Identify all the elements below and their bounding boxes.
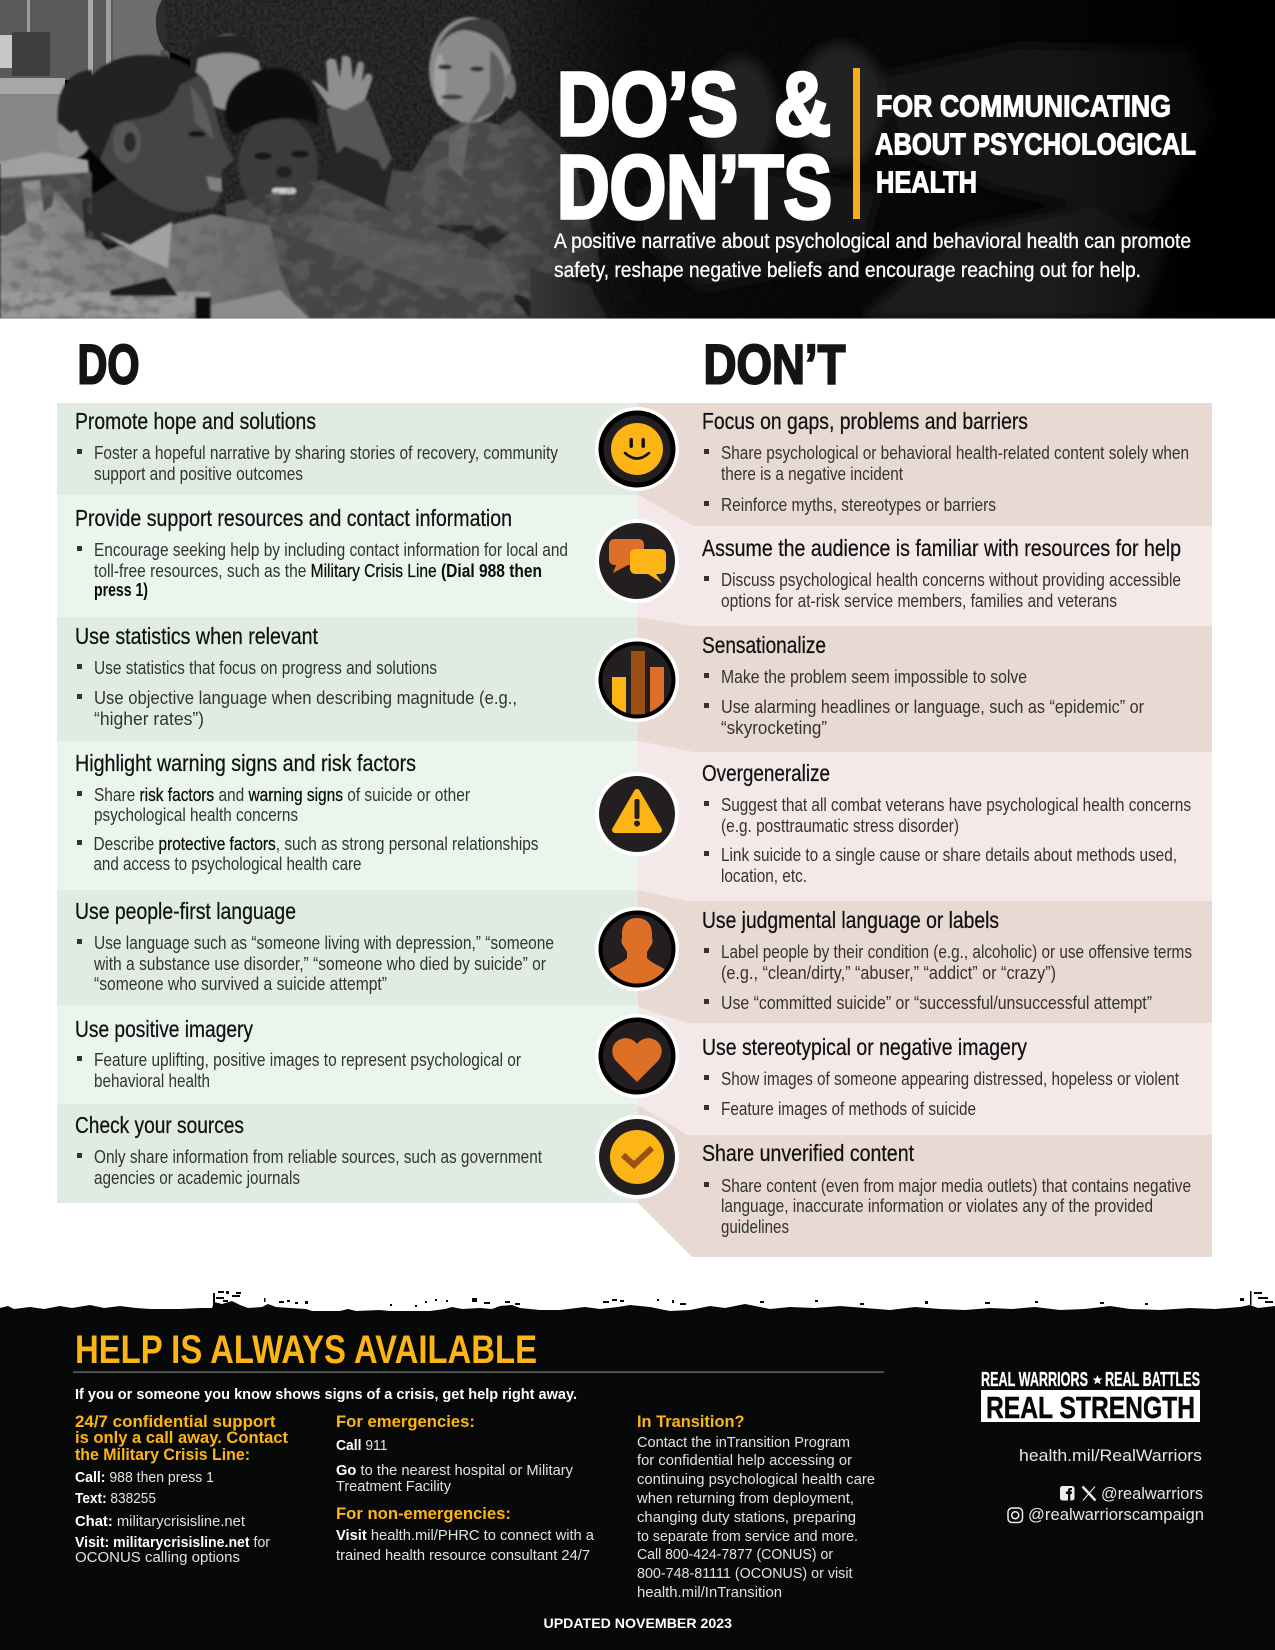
do row: check sources xyxy=(57,1104,638,1203)
dont row: overgeneralize: Link suicide to a single cause or share details about methods used, xyxy=(721,845,1177,865)
intro paragraph: safety, reshape negative beliefs and encourage reaching out for help. xyxy=(554,258,1141,282)
column: in transition: to separate from service and more. xyxy=(637,1529,858,1545)
subtitle: FOR COMMUNICATING xyxy=(876,90,1171,124)
column: in transition: for confidential help accessing or xyxy=(637,1453,852,1469)
dont row: sensationalize xyxy=(638,617,1212,752)
dont row: familiar audience: options for at-risk service members, families and veterans xyxy=(721,591,1117,611)
dont row: gaps: Focus on gaps, problems and barriers xyxy=(702,408,1028,434)
intro paragraph: A positive narrative about psychological and behavioral health can promote xyxy=(554,229,1191,253)
do row: promote hope: Promote hope and solutions xyxy=(75,408,316,434)
column: emergencies: Go to the nearest hospital or Military xyxy=(336,1463,574,1479)
dont row: judgmental language: Use judgmental language or labels xyxy=(702,907,999,933)
subtitle: ABOUT PSYCHOLOGICAL xyxy=(875,128,1196,162)
logo: Real Warriors: REAL STRENGTH xyxy=(986,1390,1195,1425)
column: emergencies: trained health resource consultant 24/7 xyxy=(336,1548,590,1564)
do row: warning signs: Describe protective factors, such as strong personal relationships xyxy=(94,834,538,854)
dont row: gaps: Share psychological or behavioral health-related content solely when xyxy=(721,443,1189,463)
do row: support resources: toll-free resources, such as the Military Crisis Line (Dial 988 then xyxy=(94,561,542,581)
heading: DON'T: DON’T xyxy=(704,332,846,396)
dont row: negative imagery: Feature images of methods of suicide xyxy=(721,1099,976,1119)
do row: positive imagery: behavioral health xyxy=(94,1071,210,1091)
header banner xyxy=(0,0,1275,319)
crisis sentence: If you or someone you know shows signs of a crisis, get help right away. xyxy=(75,1387,577,1403)
dont row: negative imagery: Use stereotypical or negative imagery xyxy=(702,1034,1027,1060)
dont row: judgmental language: (e.g., “clean/dirty,” “abuser,” “addict” or “crazy”) xyxy=(721,963,1056,983)
logo: Real Warriors: REAL WARRIORS xyxy=(981,1369,1088,1391)
intro paragraph xyxy=(554,229,1191,282)
do row: check sources: Check your sources xyxy=(75,1112,244,1138)
column: crisis line: 24/7 confidential support xyxy=(75,1413,276,1431)
dont row: negative imagery xyxy=(638,1007,1212,1135)
column: emergencies: For emergencies: xyxy=(336,1413,475,1431)
column: in transition: continuing psychological health care xyxy=(637,1472,875,1488)
do row: warning signs: psychological health concerns xyxy=(94,805,298,825)
camouflage texture xyxy=(0,110,600,319)
icon: heart xyxy=(595,1014,679,1098)
do row: statistics: Use objective language when describing magnitude (e.g., xyxy=(94,688,517,708)
logo: Real Warriors xyxy=(981,1369,1200,1425)
heading: DO: DO xyxy=(78,332,140,396)
column: emergencies: Visit health.mil/PHRC to connect with a xyxy=(336,1528,595,1544)
photo of soldiers xyxy=(0,0,1275,319)
dont row: unverified content: Share unverified content xyxy=(702,1140,914,1166)
rough torn edge xyxy=(0,1291,1275,1650)
dont row: gaps xyxy=(638,403,1212,526)
do row: warning signs xyxy=(57,741,638,890)
do row: statistics: Use statistics that focus on progress and solutions xyxy=(94,658,437,678)
dont row: familiar audience: Assume the audience is familiar with resources for help xyxy=(702,535,1181,561)
logo: Real Warriors: REAL BATTLES xyxy=(1105,1369,1200,1391)
do row: support resources: press 1) xyxy=(94,580,148,600)
column: crisis line: Chat: militarycrisisline.net xyxy=(75,1514,245,1530)
icon: bar chart xyxy=(595,638,679,722)
do row: people-first language: Use language such as “someone living with depression,” “someone xyxy=(94,933,554,953)
do row: promote hope xyxy=(57,403,638,495)
column: in transition xyxy=(636,1413,875,1601)
main soldier head xyxy=(99,72,234,213)
updated date: UPDATED NOVEMBER 2023 xyxy=(544,1615,732,1631)
main title xyxy=(557,55,832,238)
icon: warning triangle xyxy=(595,772,679,856)
footer heading: HELP IS ALWAYS AVAILABLE xyxy=(75,1328,537,1372)
column: crisis line: the Military Crisis Line: xyxy=(75,1446,250,1464)
column: in transition: changing duty stations, preparing xyxy=(637,1510,856,1526)
dont row: overgeneralize xyxy=(638,741,1212,901)
dont row: familiar audience xyxy=(638,495,1212,626)
icon: person xyxy=(595,907,679,991)
do row: statistics: Use statistics when relevant xyxy=(75,623,318,649)
dont row: overgeneralize: Suggest that all combat veterans have psychological health concerns xyxy=(721,795,1191,815)
do row: positive imagery xyxy=(57,1005,638,1104)
raised hand xyxy=(326,100,392,170)
column: crisis line: Text: 838255 xyxy=(75,1491,156,1507)
dont row: sensationalize: Sensationalize xyxy=(702,632,826,658)
rear soldier xyxy=(196,34,260,110)
do row: promote hope: support and positive outcomes xyxy=(94,464,303,484)
do row: positive imagery: Feature uplifting, positive images to represent psychological or xyxy=(94,1050,521,1070)
do row: support resources: Encourage seeking help by including contact information for local and xyxy=(94,540,568,560)
do row: warning signs: and access to psychological health care xyxy=(94,854,362,874)
subtitle: HEALTH xyxy=(876,166,977,200)
column: in transition: health.mil/InTransition xyxy=(637,1585,782,1601)
right soldier xyxy=(395,110,600,300)
dont row: gaps: Reinforce myths, stereotypes or barriers xyxy=(721,495,996,515)
column: in transition: when returning from deployment, xyxy=(636,1491,854,1507)
column: emergencies xyxy=(336,1413,595,1564)
dont row: overgeneralize: location, etc. xyxy=(721,866,807,886)
do row: positive imagery: Use positive imagery xyxy=(75,1016,253,1042)
icon: smiley xyxy=(595,407,679,491)
do row: people-first language: “someone who survived a suicide attempt” xyxy=(94,974,387,994)
do row: check sources: Only share information from reliable sources, such as government xyxy=(94,1147,542,1167)
column: crisis line: Call: 988 then press 1 xyxy=(75,1470,214,1486)
column: crisis line: is only a call away. Contact xyxy=(75,1429,289,1447)
icon: X xyxy=(1082,1486,1096,1500)
do row: statistics xyxy=(57,617,638,741)
column: in transition: Contact the inTransition Program xyxy=(637,1435,850,1451)
column: in transition: 800-748-81111 (OCONUS) or visit xyxy=(637,1566,852,1582)
dont row: unverified content: language, inaccurate information or violates any of the provided xyxy=(721,1196,1153,1216)
subtitle xyxy=(875,90,1196,200)
column: crisis line xyxy=(75,1413,289,1566)
do row: warning signs: Share risk factors and warning signs of suicide or other xyxy=(94,785,470,805)
dont row: judgmental language: Label people by their condition (e.g., alcoholic) or use offensive terms xyxy=(721,942,1192,962)
social links: @realwarriorscampaign xyxy=(1028,1505,1204,1524)
do row: check sources: agencies or academic journals xyxy=(94,1168,300,1188)
column: emergencies: Call 911 xyxy=(336,1438,388,1454)
do row: promote hope: Foster a hopeful narrative by sharing stories of recovery, community xyxy=(94,443,558,463)
do row: people-first language: with a substance use disorder,” “someone who died by suicide” or xyxy=(93,954,546,974)
column: crisis line: OCONUS calling options xyxy=(75,1550,240,1566)
do row: support resources: Provide support resources and contact information xyxy=(75,505,512,531)
dont row: overgeneralize: (e.g. posttraumatic stress disorder) xyxy=(721,816,959,836)
do row: support resources xyxy=(57,495,638,617)
column: in transition: In Transition? xyxy=(637,1413,744,1431)
column: in transition: Call 800-424-7877 (CONUS) or xyxy=(637,1547,833,1563)
dont row: overgeneralize: Overgeneralize xyxy=(702,760,830,786)
icon: instagram xyxy=(1008,1508,1022,1522)
do row: people-first language: Use people-first language xyxy=(75,898,296,924)
footer panel xyxy=(0,1291,1275,1650)
column: emergencies: Treatment Facility xyxy=(336,1479,452,1495)
dont row: familiar audience: Discuss psychological health concerns without providing accessible xyxy=(721,570,1181,590)
dont row: sensationalize: Use alarming headlines or language, such as “epidemic” or xyxy=(721,697,1144,717)
column: crisis line: Visit: militarycrisisline.net for xyxy=(75,1535,270,1551)
column: emergencies: For non-emergencies: xyxy=(336,1505,511,1523)
dont row: gaps: there is a negative incident xyxy=(721,464,903,484)
dont row: sensationalize: Make the problem seem impossible to solve xyxy=(721,667,1027,687)
back-left soldier xyxy=(0,152,92,240)
dont row: unverified content xyxy=(638,1105,1212,1257)
main title: DO’S xyxy=(557,55,738,155)
do row: people-first language xyxy=(57,890,638,1005)
social links xyxy=(1008,1484,1204,1524)
dont row: judgmental language xyxy=(638,890,1212,1023)
dont row: unverified content: Share content (even from major media outlets) that contains negative xyxy=(721,1176,1191,1196)
icon: speech bubbles xyxy=(595,519,679,603)
do row: warning signs: Highlight warning signs and risk factors xyxy=(75,750,416,776)
main soldier body xyxy=(0,190,530,319)
pack xyxy=(320,146,510,250)
do row: statistics: “higher rates”) xyxy=(94,709,204,729)
panel: DO column xyxy=(57,403,638,1203)
social links: @realwarriors xyxy=(1101,1484,1203,1503)
gold divider xyxy=(853,68,860,219)
main title: & xyxy=(774,55,831,155)
dont row: negative imagery: Show images of someone appearing distressed, hopeless or violent xyxy=(721,1069,1179,1089)
dont row: sensationalize: “skyrocketing” xyxy=(721,718,827,738)
woman soldier xyxy=(224,180,516,301)
icon: check mark xyxy=(595,1115,679,1199)
icon: facebook xyxy=(1060,1486,1074,1500)
panel: DON'T column xyxy=(638,403,1212,1257)
dont row: unverified content: guidelines xyxy=(721,1217,789,1237)
website: health.mil/RealWarriors xyxy=(1019,1446,1202,1465)
main title: DON’TS xyxy=(557,138,832,238)
dont row: judgmental language: Use “committed suicide” or “successful/unsuccessful attempt” xyxy=(721,993,1152,1013)
